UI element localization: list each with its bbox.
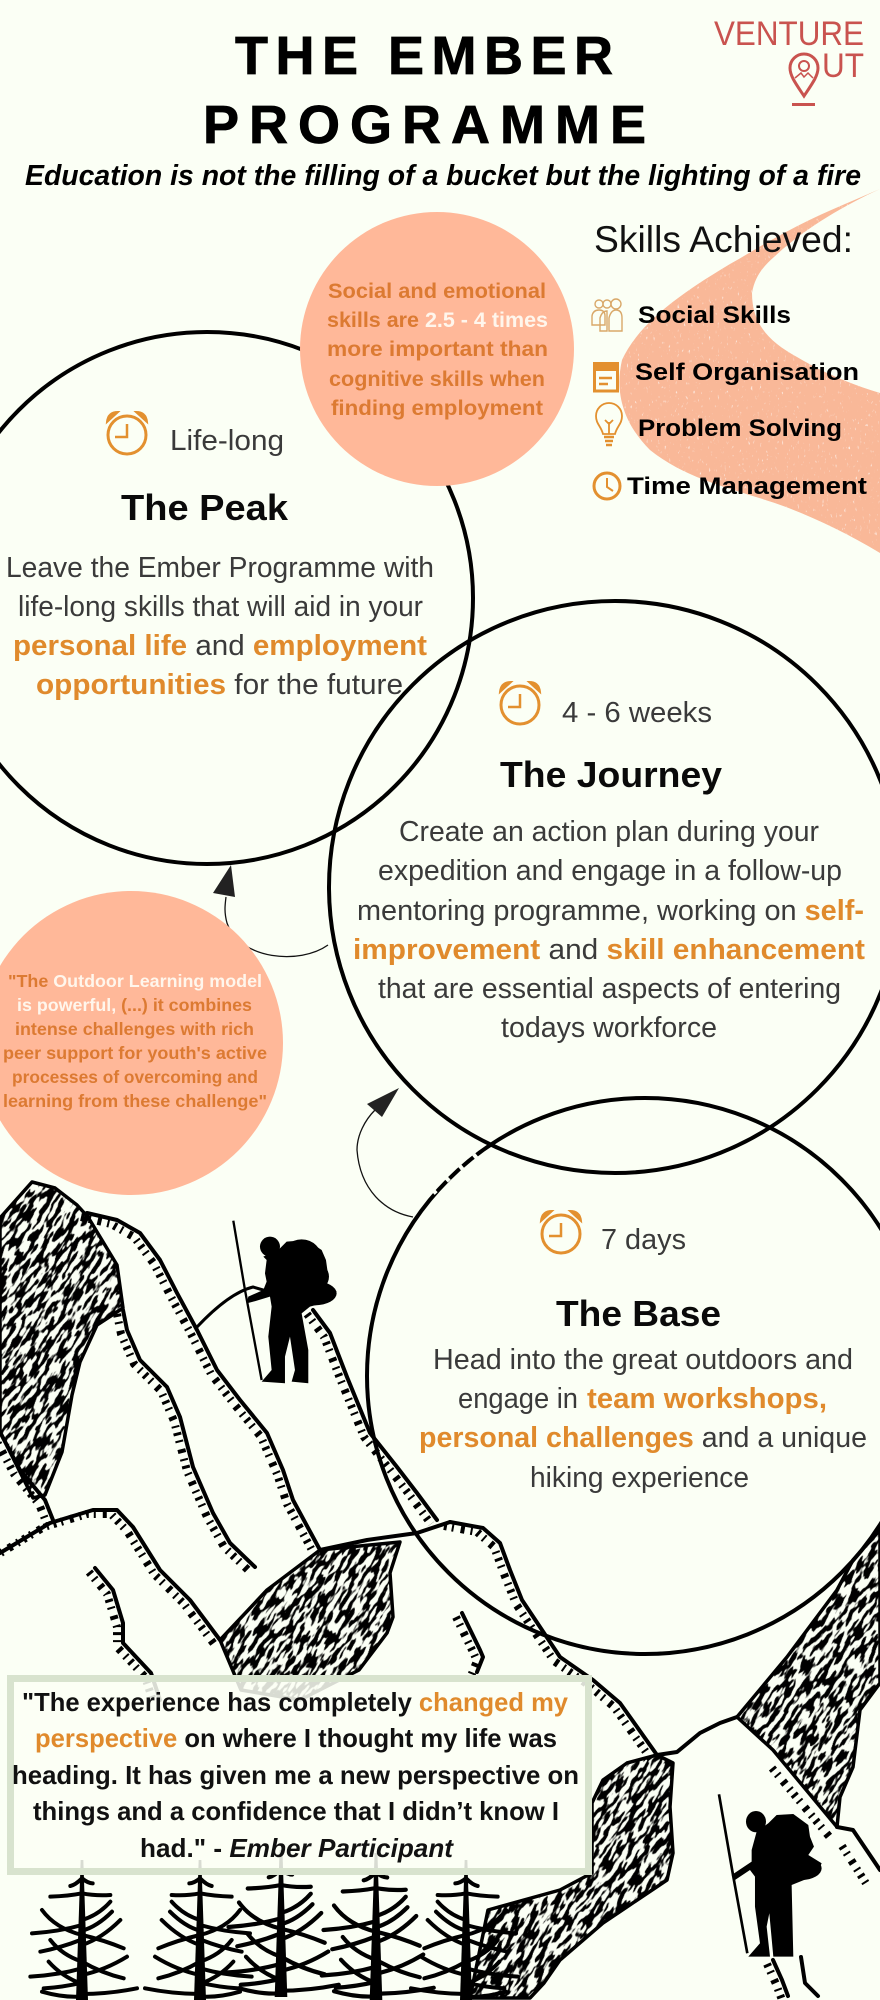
- testimonial box: perspective on where I thought my life was: [35, 1723, 557, 1753]
- mountains illustration: [0, 1182, 880, 2000]
- callout: outdoor learning model quote: peer support for youth's active: [3, 1043, 267, 1063]
- panel: the base: [419, 1211, 867, 1494]
- mountain hatching: [0, 1217, 782, 2000]
- icon: clock: [594, 473, 620, 499]
- description: that are essential aspects of entering: [378, 973, 841, 1005]
- callout: social and emotional skills: more important than: [327, 338, 548, 361]
- arrow: base to journey: [357, 1088, 413, 1217]
- description: team workshops,: [587, 1383, 827, 1415]
- heading: The Base: [556, 1293, 721, 1334]
- heading: skills achieved: Skills Achieved:: [594, 219, 853, 260]
- skill: social skills: Social Skills: [638, 302, 791, 329]
- icon: alarm clock: [541, 1211, 581, 1253]
- logo: venture out: [714, 15, 864, 106]
- mountain ridge lines: [0, 1213, 880, 1996]
- description: engage in: [458, 1383, 578, 1415]
- title: THE EMBER: [235, 26, 613, 86]
- skill: time management: Time Management: [627, 473, 867, 500]
- callout: outdoor learning model quote: intense challenges with rich: [15, 1019, 254, 1039]
- callout: social and emotional skills: skills are 2.5 - 4 times: [327, 309, 548, 332]
- title: [203, 26, 646, 155]
- icon: alarm clock: [500, 682, 540, 724]
- skill: social skills: [592, 299, 791, 331]
- icon: calendar: [593, 362, 619, 391]
- brush swoosh: [619, 189, 880, 553]
- circle: the base outline: [367, 1098, 880, 1654]
- description: personal life and employment: [13, 630, 427, 662]
- mountain textured rock: [0, 1182, 880, 1998]
- callout: outdoor learning model quote: learning from these challenge": [3, 1091, 267, 1111]
- logo: venture out: UT: [822, 47, 864, 85]
- tagline: Education is not the filling of a bucket but the lighting of a fire: [25, 160, 861, 192]
- testimonial box: things and a confidence that I didn’t know I: [33, 1796, 559, 1826]
- icon: light bulb: [596, 403, 622, 445]
- title: PROGRAMME: [203, 95, 646, 155]
- description: todays workforce: [501, 1012, 717, 1044]
- heading: The Peak: [121, 487, 289, 528]
- callout: social and emotional skills: finding employment: [331, 397, 543, 420]
- climber at lower right: [719, 1794, 822, 1957]
- description: mentoring programme, working on self-: [357, 895, 864, 927]
- callout: outdoor learning model quote: is powerful, (...) it combines: [17, 995, 252, 1015]
- logo: venture out: VENTURE: [714, 15, 864, 53]
- description: life-long skills that will aid in your: [18, 591, 423, 623]
- panel: the peak: [6, 412, 434, 701]
- description: [353, 816, 865, 1044]
- arrow: journey to peak: [213, 865, 328, 957]
- testimonial box: heading. It has given me a new perspective on: [12, 1760, 579, 1790]
- callout: social and emotional skills: [300, 212, 574, 486]
- description: opportunities for the future: [36, 669, 403, 701]
- icon: alarm clock: [107, 412, 147, 454]
- description: [6, 552, 434, 701]
- circle: the peak outline: [0, 332, 473, 864]
- description: Leave the Ember Programme with: [6, 552, 434, 584]
- description: hiking experience: [530, 1462, 749, 1494]
- testimonial box: [10, 1678, 588, 1872]
- skill: self organisation: Self Organisation: [635, 359, 859, 386]
- climber on the ridge: [233, 1221, 337, 1383]
- panel: the journey: [353, 682, 865, 1044]
- description: improvement and skill enhancement: [353, 934, 865, 966]
- skill: self organisation: [593, 359, 859, 391]
- heading: The Journey: [500, 754, 722, 795]
- description: [419, 1344, 867, 1494]
- duration: 4 - 6 weeks: [562, 697, 712, 729]
- callout: outdoor learning model quote: [0, 891, 283, 1195]
- icon: people: [592, 299, 622, 331]
- description: expedition and engage in a follow-up: [378, 855, 842, 887]
- duration: Life-long: [170, 425, 284, 457]
- testimonial box: "The experience has completely changed my: [22, 1687, 569, 1717]
- testimonial box: had." - Ember Participant: [140, 1833, 454, 1863]
- skill: problem solving: [596, 403, 842, 445]
- circle: the journey outline: [329, 601, 880, 1173]
- callout: outdoor learning model quote: "The Outdoor Learning model: [8, 971, 262, 991]
- skill: problem solving: Problem Solving: [638, 415, 842, 442]
- description: personal challenges and a unique: [419, 1422, 867, 1454]
- callout: social and emotional skills: Social and emotional: [328, 280, 546, 303]
- callout: outdoor learning model quote: processes of overcoming and: [12, 1067, 258, 1087]
- callout: social and emotional skills: cognitive skills when: [329, 368, 545, 391]
- duration: 7 days: [601, 1224, 686, 1256]
- description: Create an action plan during your: [399, 816, 819, 848]
- pine trees: [30, 1850, 518, 2000]
- description: Head into the great outdoors and: [433, 1344, 853, 1376]
